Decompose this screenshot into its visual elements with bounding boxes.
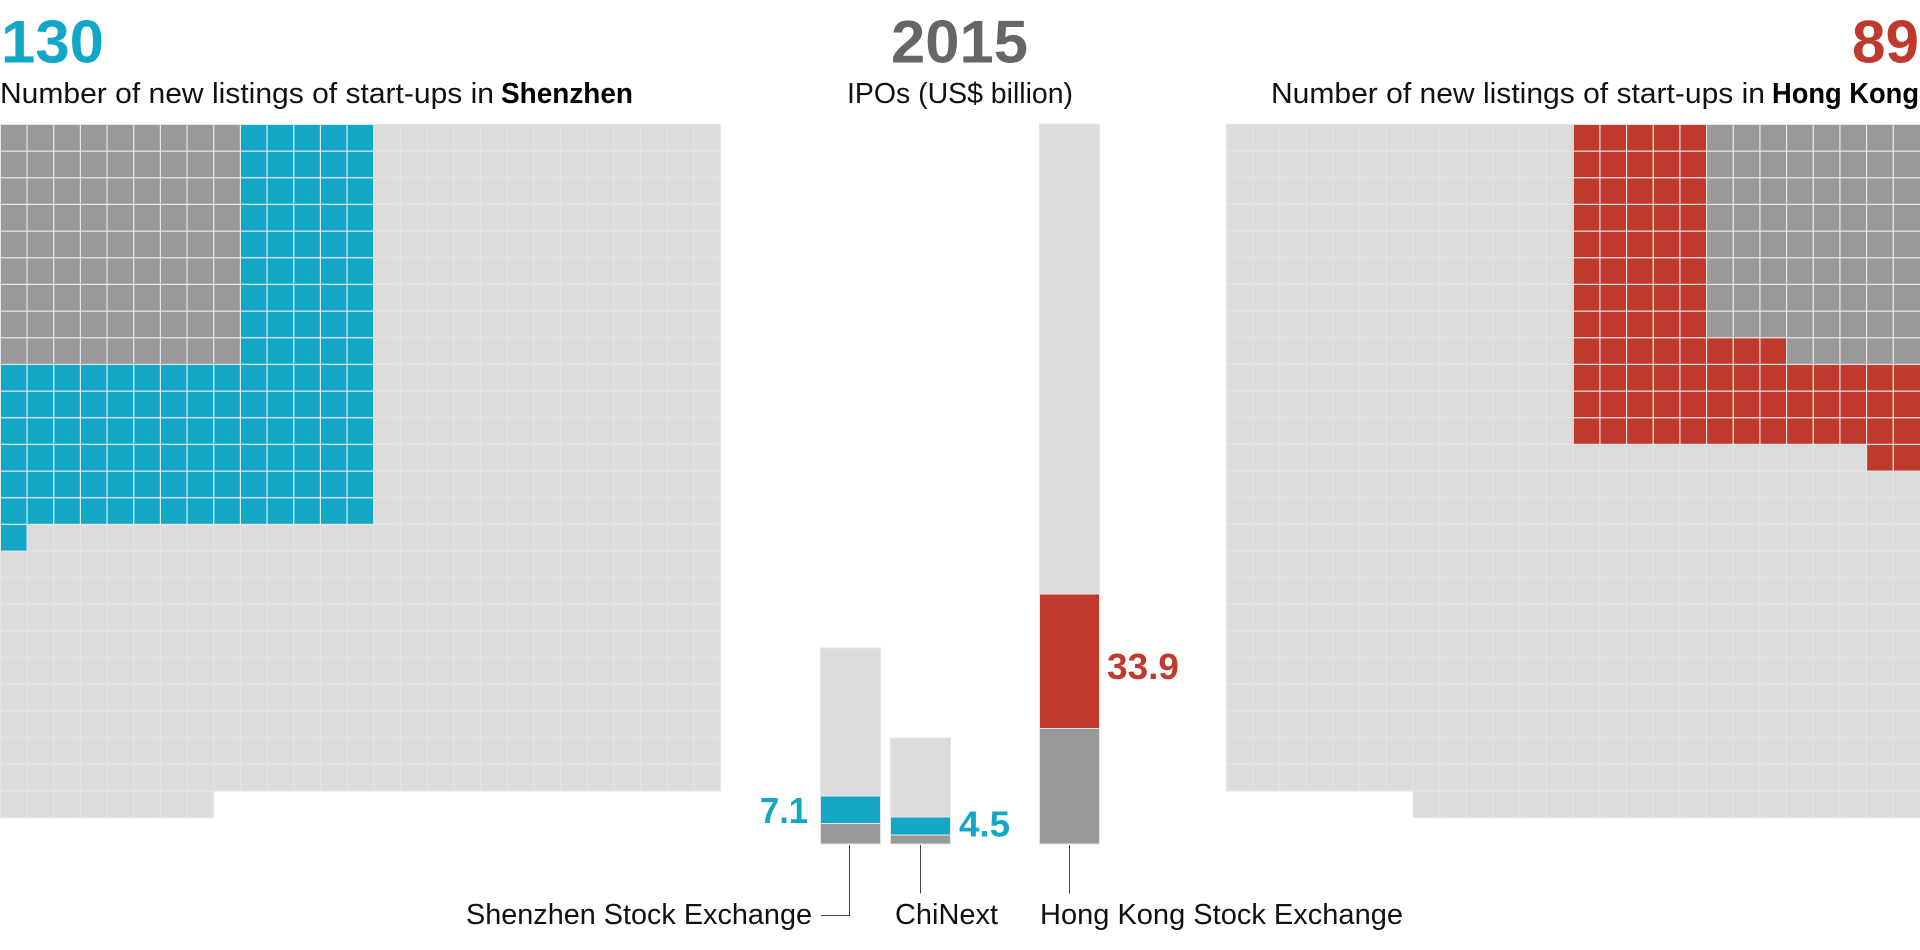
number: 89: 89 <box>1852 8 1919 76</box>
bar: Shenzhen Stock Exchange <box>820 648 880 844</box>
value: 4.5: 4.5 <box>959 804 1010 844</box>
value: 33.9: 33.9 <box>1107 646 1179 687</box>
bar: Hong Kong Stock Exchange <box>1040 124 1100 844</box>
waffle grey cells <box>1706 124 1920 364</box>
leader line: ChiNext <box>920 845 922 894</box>
bar: ChiNext <box>890 738 950 844</box>
subtitle: Shenzhen listings: Shenzhen <box>501 78 633 110</box>
waffle background cells <box>1226 124 1920 817</box>
leader line: Shenzhen Stock Exchange <box>821 845 850 916</box>
subtitle: Hong Kong listings: Number of new listings of start-ups in <box>1271 78 1765 110</box>
value: 7.1: 7.1 <box>760 790 808 831</box>
waffle chart: Hong Kong listings <box>1226 124 1920 818</box>
waffle background cells <box>0 124 720 817</box>
label: Hong Kong Stock Exchange: Hong Kong Stock Exchange <box>1040 899 1403 931</box>
waffle grey cells <box>0 124 240 364</box>
waffle chart: Shenzhen listings <box>0 124 720 818</box>
waffle red cells: 89 start-ups <box>1573 124 1920 471</box>
label: Shenzhen Stock Exchange: Shenzhen Stock Exchange <box>466 899 812 931</box>
centre heading: 2015 IPOs <box>847 8 1073 110</box>
left heading: 130 Shenzhen listings <box>0 8 633 110</box>
waffle blue cells: 130 start-ups <box>0 124 373 551</box>
subtitle: Shenzhen listings: Number of new listings of start-ups in <box>0 78 494 110</box>
number: 130: 130 <box>1 8 104 76</box>
subtitle: IPOs (US$ billion): IPOs (US$ billion) <box>847 78 1073 110</box>
right heading: 89 Hong Kong listings <box>1271 8 1919 110</box>
label: ChiNext: ChiNext <box>895 899 998 931</box>
year: 2015: 2015 <box>891 8 1028 76</box>
leader line: Hong Kong Stock Exchange <box>1068 845 1070 894</box>
